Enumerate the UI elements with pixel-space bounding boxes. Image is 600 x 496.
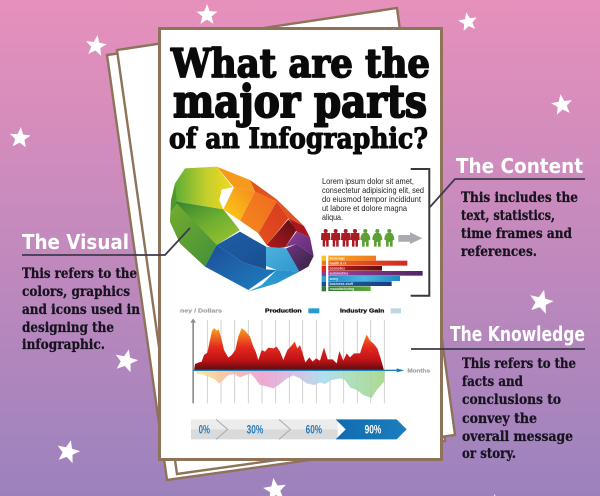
- title: of an Infographic?: [169, 122, 428, 155]
- donut: dark blue top: [217, 232, 266, 269]
- donut: crimson top band: [288, 218, 310, 237]
- horizontal bar list: automotive: [330, 272, 348, 276]
- progress arrow bar: [191, 419, 407, 439]
- y axis: [190, 318, 196, 403]
- callout: the visual: designing the: [22, 320, 114, 336]
- callout: the knowledge: facts and: [462, 374, 523, 390]
- donut: green segment: [170, 202, 240, 267]
- progress arrow bar: 0%: [199, 423, 210, 437]
- donut: light blue front: [248, 270, 299, 292]
- x axis arrow: [193, 368, 404, 372]
- horizontal bar list: beverage: [330, 257, 345, 261]
- chart legend and labels: ney / Dollars: [180, 308, 222, 314]
- callout: the knowledge: or story.: [462, 446, 516, 462]
- title: [169, 41, 430, 155]
- horizontal bar list: [322, 256, 423, 291]
- callout: the knowledge: overall message: [462, 429, 573, 445]
- horizontal bar list: manufacturing: [330, 287, 354, 291]
- callout: the knowledge: conclusions to: [462, 392, 561, 408]
- donut: purple top: [285, 232, 314, 256]
- title: major parts: [173, 75, 427, 128]
- callout: the content: time frames and: [461, 226, 572, 242]
- callout: the content: This includes the: [461, 190, 578, 206]
- donut: orange inner face: [240, 192, 277, 233]
- donut: left outer green edge: [170, 183, 180, 243]
- lorem ipsum text block: aliqua.: [322, 212, 343, 222]
- title: What are the: [170, 41, 430, 87]
- horizontal bar list: health & rx: [330, 262, 346, 266]
- callout: the content: [430, 154, 585, 260]
- chart legend and labels: Industry Gain: [340, 309, 385, 315]
- callout: the visual: [22, 228, 190, 353]
- callout: the content: text, statistics,: [461, 208, 555, 224]
- chart legend and labels: Production: [265, 309, 302, 315]
- horizontal bar list: army: [330, 277, 339, 281]
- horizontal bar list: business stuff: [330, 282, 354, 286]
- callout: the knowledge: This refers to the: [462, 356, 576, 372]
- donut: yellow inner face: [223, 187, 255, 221]
- callout: the visual: The Visual: [22, 230, 129, 254]
- lorem ipsum text block: [322, 176, 424, 222]
- callout: the knowledge: convey the: [462, 411, 537, 427]
- lorem ipsum text block: ut labore et dolore magna: [322, 203, 407, 213]
- chart legend and labels: Months: [407, 368, 430, 374]
- donut chart visual: [170, 167, 314, 292]
- callout: the knowledge: [411, 322, 585, 462]
- callout: the visual: infographic.: [22, 337, 105, 353]
- callout: the content: The Content: [456, 154, 583, 178]
- progress arrow bar: 60%: [306, 423, 322, 437]
- horizontal bar list: cosmetics: [330, 267, 345, 271]
- callout: the visual: This refers to the: [22, 266, 137, 282]
- donut: green front face: [170, 203, 217, 267]
- progress arrow bar: 30%: [247, 423, 264, 437]
- donut: orange top band: [217, 167, 255, 192]
- callout: the visual: and icons used in: [22, 302, 140, 318]
- chart legend and labels: [180, 308, 430, 374]
- donut: red top band: [250, 180, 304, 226]
- donut: dark purple face: [286, 244, 314, 272]
- lorem ipsum text block: do eiusmod tempor incididunt: [322, 194, 422, 204]
- area chart: [180, 308, 430, 403]
- main paper: [160, 28, 442, 460]
- upper red area: [194, 328, 384, 370]
- callout: the visual: colors, graphics: [22, 284, 130, 300]
- donut: dark red inner face: [267, 219, 297, 249]
- callout: the content: references.: [461, 244, 537, 260]
- lorem ipsum text block: Lorem ipsum dolor sit amet,: [322, 176, 414, 186]
- donut: centre hole: [234, 221, 267, 246]
- arrow: grey pictogram arrow: [398, 232, 422, 244]
- back paper sheets: [107, 8, 455, 480]
- people pictogram: [321, 229, 394, 247]
- progress arrow bar: 90%: [365, 423, 382, 437]
- content bracket: [411, 169, 429, 296]
- donut: light green to yellow segment: [175, 167, 233, 209]
- lower pastel area: [194, 370, 385, 398]
- lorem ipsum text block: consectetur adipisicing elit, sed: [322, 185, 424, 195]
- donut: light blue top: [266, 247, 299, 272]
- donut: red-orange inner face: [258, 202, 288, 245]
- donut: mid blue front: [205, 245, 277, 290]
